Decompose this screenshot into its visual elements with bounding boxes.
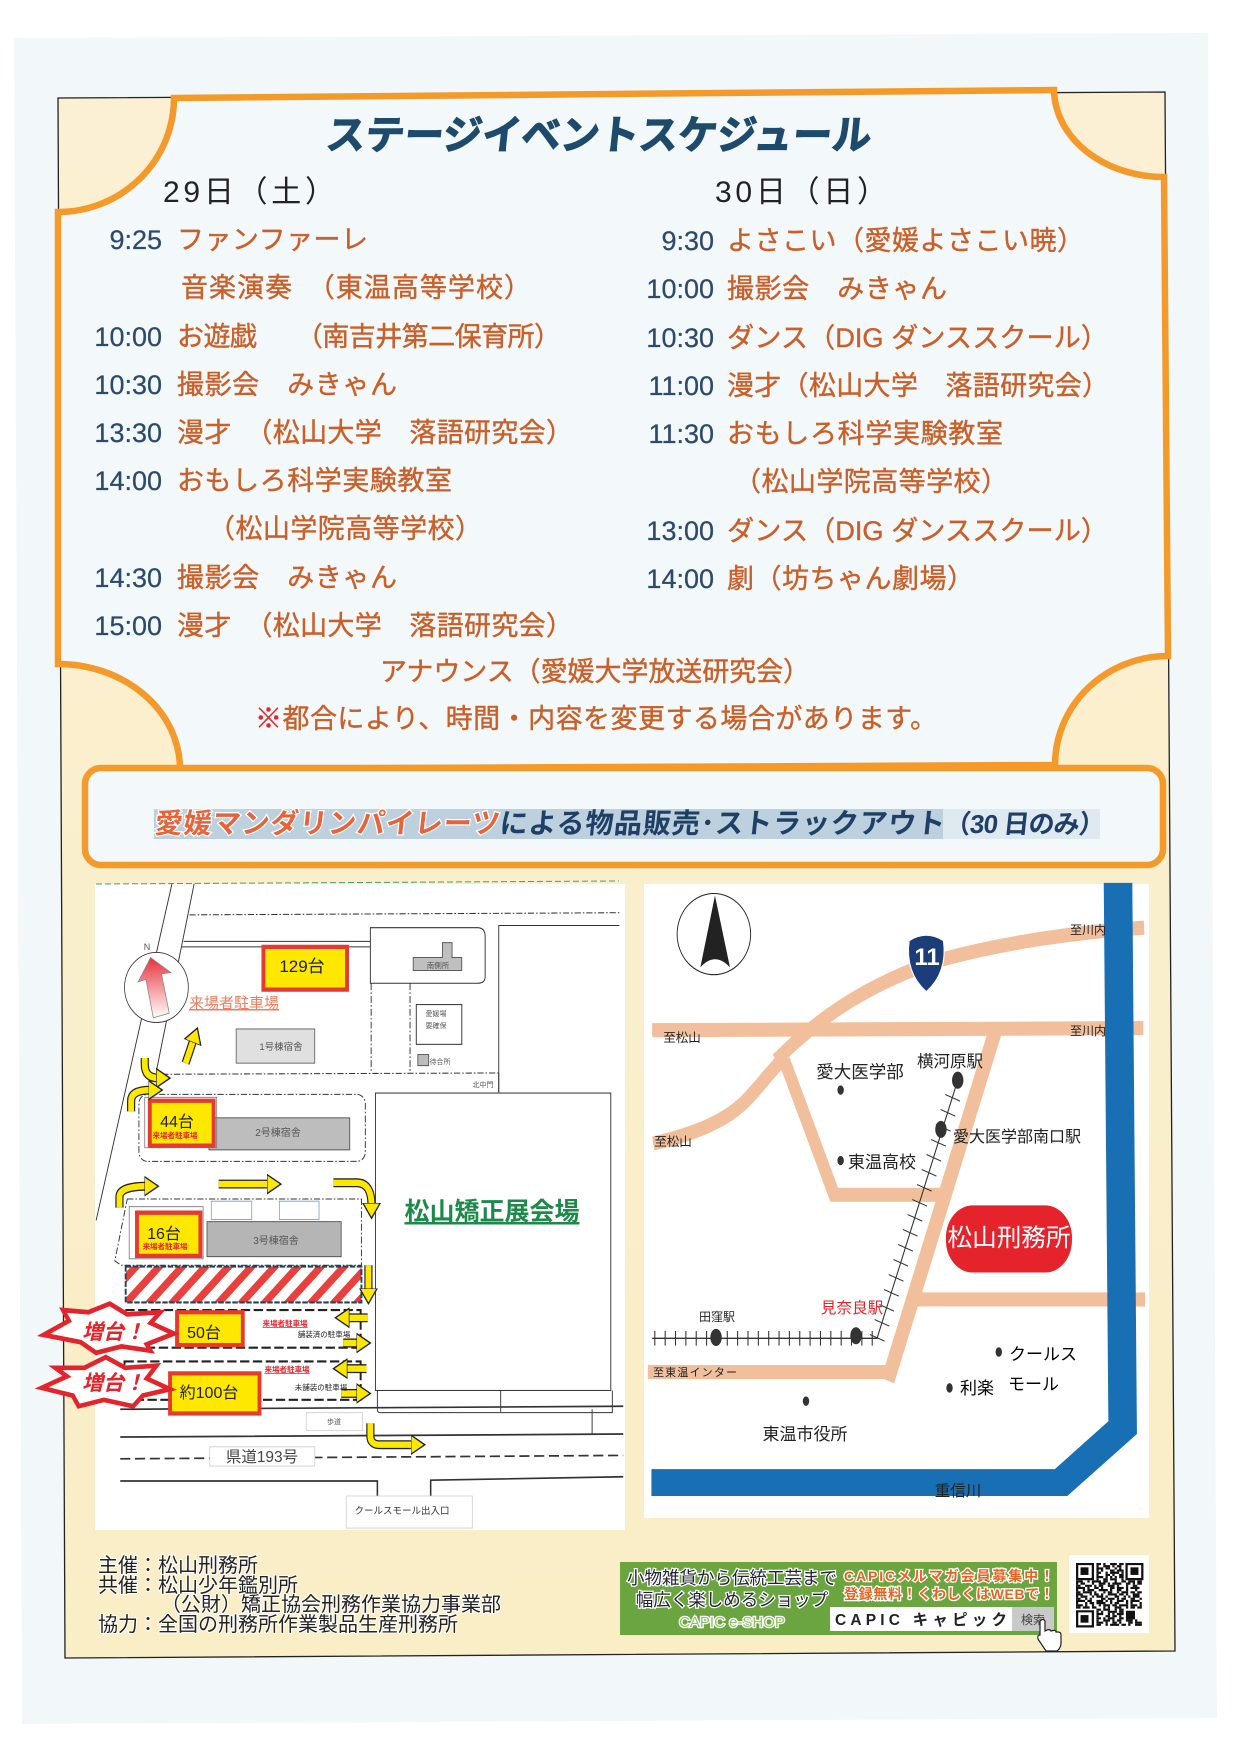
organisers: 共催：松山少年鑑別所 [98,1574,298,1597]
stations [710,1072,1002,1406]
map labels: 見奈良駅 [821,1299,884,1317]
map labels: 歩道 [327,1417,341,1426]
day 1 heading: 29日（土） [163,176,335,209]
schedule: 30th: （松山学院高等学校） [734,467,1008,497]
map labels [142,942,494,1517]
search box: CAPIC キャピック [835,1611,1007,1629]
map labels: 来場者駐車場 [264,1364,310,1374]
schedule: 30th: 13:00 [646,516,714,546]
map labels [653,923,1106,1500]
schedule: 29th: 10:30 [94,370,162,400]
building 2 [209,1118,350,1150]
schedule: 29th: 漫才 （松山大学 落語研究会） [177,418,573,448]
dashed parking zones [125,1310,361,1400]
map labels: 田窪駅 [699,1310,735,1324]
burst: added spaces 2 [42,1357,170,1406]
icon: hand cursor [1038,1620,1061,1651]
schedule: 30th: 11:30 [648,419,714,449]
map labels: N [144,942,150,952]
schedule: 29th: 音楽演奏 （東温高等学校） [181,273,531,303]
map labels: 至川内 [1070,923,1106,937]
map labels: 至松山 [663,1031,701,1045]
building 1 [236,1029,315,1063]
map labels: 来場者駐車場 [152,1130,198,1140]
schedule: 30th: 劇（坊ちゃん劇場） [727,564,974,594]
map labels: 舗装済の駐車場 [298,1329,351,1339]
waiting room [418,1055,429,1066]
map labels: 129台 [279,957,325,976]
schedule: 29th [94,225,573,641]
burst: added spaces 1: 増台！ [82,1321,145,1344]
map labels: 利楽 [960,1379,994,1398]
map labels: 3号棟宿舎 [253,1234,299,1247]
road label boxes [210,1413,472,1528]
shop copy: 小物雑貨から伝統工芸まで [627,1568,837,1588]
map labels: 至松山 [654,1135,692,1149]
roads [648,928,1145,1381]
map labels: 至東温インター [653,1366,737,1379]
map labels: 東温高校 [848,1153,916,1172]
compass arrow [125,952,188,1023]
date note: （30 日のみ） [943,809,1107,839]
schedule: 30th: 14:00 [646,564,714,594]
panel: merchandise banner [85,768,1163,865]
notice: ※都合により、時間・内容を変更する場合があります。 [255,704,937,734]
schedule: 30th: ダンス（DIG ダンススクール） [727,322,1108,353]
schedule: 29th: 撮影会 みきゃん [177,563,397,593]
map labels: 重信川 [935,1482,981,1500]
schedule: 30th [646,226,1109,594]
schedule: 29th: 漫才 （松山大学 落語研究会） [177,611,573,641]
QR code [1069,1555,1149,1633]
schedule: 30th: おもしろ科学実験教室 [727,419,1003,449]
map labels: 愛大医学部南口駅 [953,1128,1081,1146]
map labels: 2号棟宿舎 [255,1126,301,1139]
blue markers [211,1201,319,1220]
site plan lines [96,884,623,1496]
schedule: 30th: 10:30 [646,323,714,353]
map labels: クールス [1009,1345,1077,1364]
map labels: 44台 [160,1113,194,1131]
schedule: 29th: 13:30 [94,418,162,448]
prison label: 松山刑務所 [948,1224,1070,1252]
railway [652,1080,958,1338]
burst: added spaces 1 [44,1304,174,1353]
map labels: 来場者駐車場 [189,995,279,1012]
venue name: 松山矯正展会場 [404,1198,580,1226]
CAPIC banner [620,1562,1061,1651]
map labels: 50台 [187,1324,221,1342]
search box [830,1607,1054,1631]
map: venue and parking [42,881,625,1530]
organisers: 協力：全国の刑務所作業製品生産刑務所 [98,1613,458,1636]
day 2 heading: 30日（日） [715,176,887,209]
map labels: 横河原駅 [917,1052,983,1071]
map labels: 1号棟宿舎 [259,1041,303,1053]
map labels: 東温市役所 [762,1425,848,1444]
map labels: 来場者駐車場 [262,1318,308,1328]
burst: added spaces 2: 増台！ [82,1372,145,1395]
map labels: 16台 [147,1225,181,1243]
map labels: 県道193号 [226,1448,298,1466]
map labels: 11 [914,944,940,971]
parking badges [137,947,347,1414]
map labels: 来場者駐車場 [142,1241,188,1251]
map labels: 要確保 [426,1021,446,1030]
schedule: 29th: 撮影会 みきゃん [177,370,397,400]
map labels: 待合所 [430,1057,450,1066]
schedule: 30th: 漫才（松山大学 落語研究会） [727,371,1109,401]
map labels: 南側所 [427,960,450,970]
organisers [98,1554,501,1636]
schedule: 29th: 14:30 [94,563,162,593]
map labels: 至川内 [1070,1024,1106,1038]
map labels: 約100台 [180,1384,238,1402]
map labels: 北中門 [472,1080,494,1089]
river [651,883,1137,1496]
schedule: 30th: 11:00 [648,371,714,401]
map labels: 未舗装の駐車場 [295,1382,348,1392]
schedule: 30th: 10:00 [646,274,714,304]
CAPIC banner: 登録無料！くわしくはWEBで！ [844,1586,1054,1602]
schedule: 30th: よさこい（愛媛よさこい暁） [727,226,1084,256]
north compass [677,894,751,975]
map labels: 愛大医学部 [816,1062,904,1082]
map labels: クールスモール出入口 [354,1505,450,1517]
map labels: モール [1008,1375,1059,1394]
guard building [413,943,462,970]
title: ステージイベントスケジュール [324,114,874,158]
map labels: 愛媛場 [426,1009,446,1018]
schedule: 29th: ファンファーレ [177,225,368,255]
schedule: 29th: おもしろ科学実験教室 [177,466,452,496]
schedule: 29th: 14:00 [94,466,162,496]
CAPIC banner: 幅広く楽しめるショップ [636,1590,829,1610]
schedule: 30th: ダンス（DIG ダンススクール） [727,515,1108,546]
mandarin pirates name: 愛媛マンダリンパイレーツ [153,807,502,839]
announcer line: アナウンス（愛媛大学放送研究会） [380,657,810,687]
route 11 shield [908,935,944,992]
search box: 検索 [1021,1613,1045,1627]
CAPIC banner: CAPIC e-SHOP [679,1614,785,1631]
schedule: 29th: 10:00 [94,322,162,352]
organisers: （公財）矯正協会刑務作業協力事業部 [161,1593,501,1616]
sales text: による物品販売･ストラックアウト [498,808,947,839]
schedule: 30th: 撮影会 みきゃん [727,274,947,304]
organisers: 主催：松山刑務所 [98,1554,258,1577]
prison marker [946,1205,1072,1273]
hatched zone [126,1267,361,1302]
schedule: 29th: （松山学院高等学校） [208,514,482,544]
building 3 [207,1222,341,1257]
schedule: 29th: 9:25 [109,225,162,255]
schedule: 29th: 15:00 [94,611,162,641]
schedule: 29th: お遊戯 （南吉井第二保育所） [177,322,561,352]
schedule: 30th: 9:30 [661,226,714,256]
yellow direction arrows [119,1040,413,1445]
panel: stage schedule [58,90,1168,769]
map: area access [644,883,1149,1518]
newsletter copy: CAPICメルマガ会員募集中！ [844,1568,1054,1584]
